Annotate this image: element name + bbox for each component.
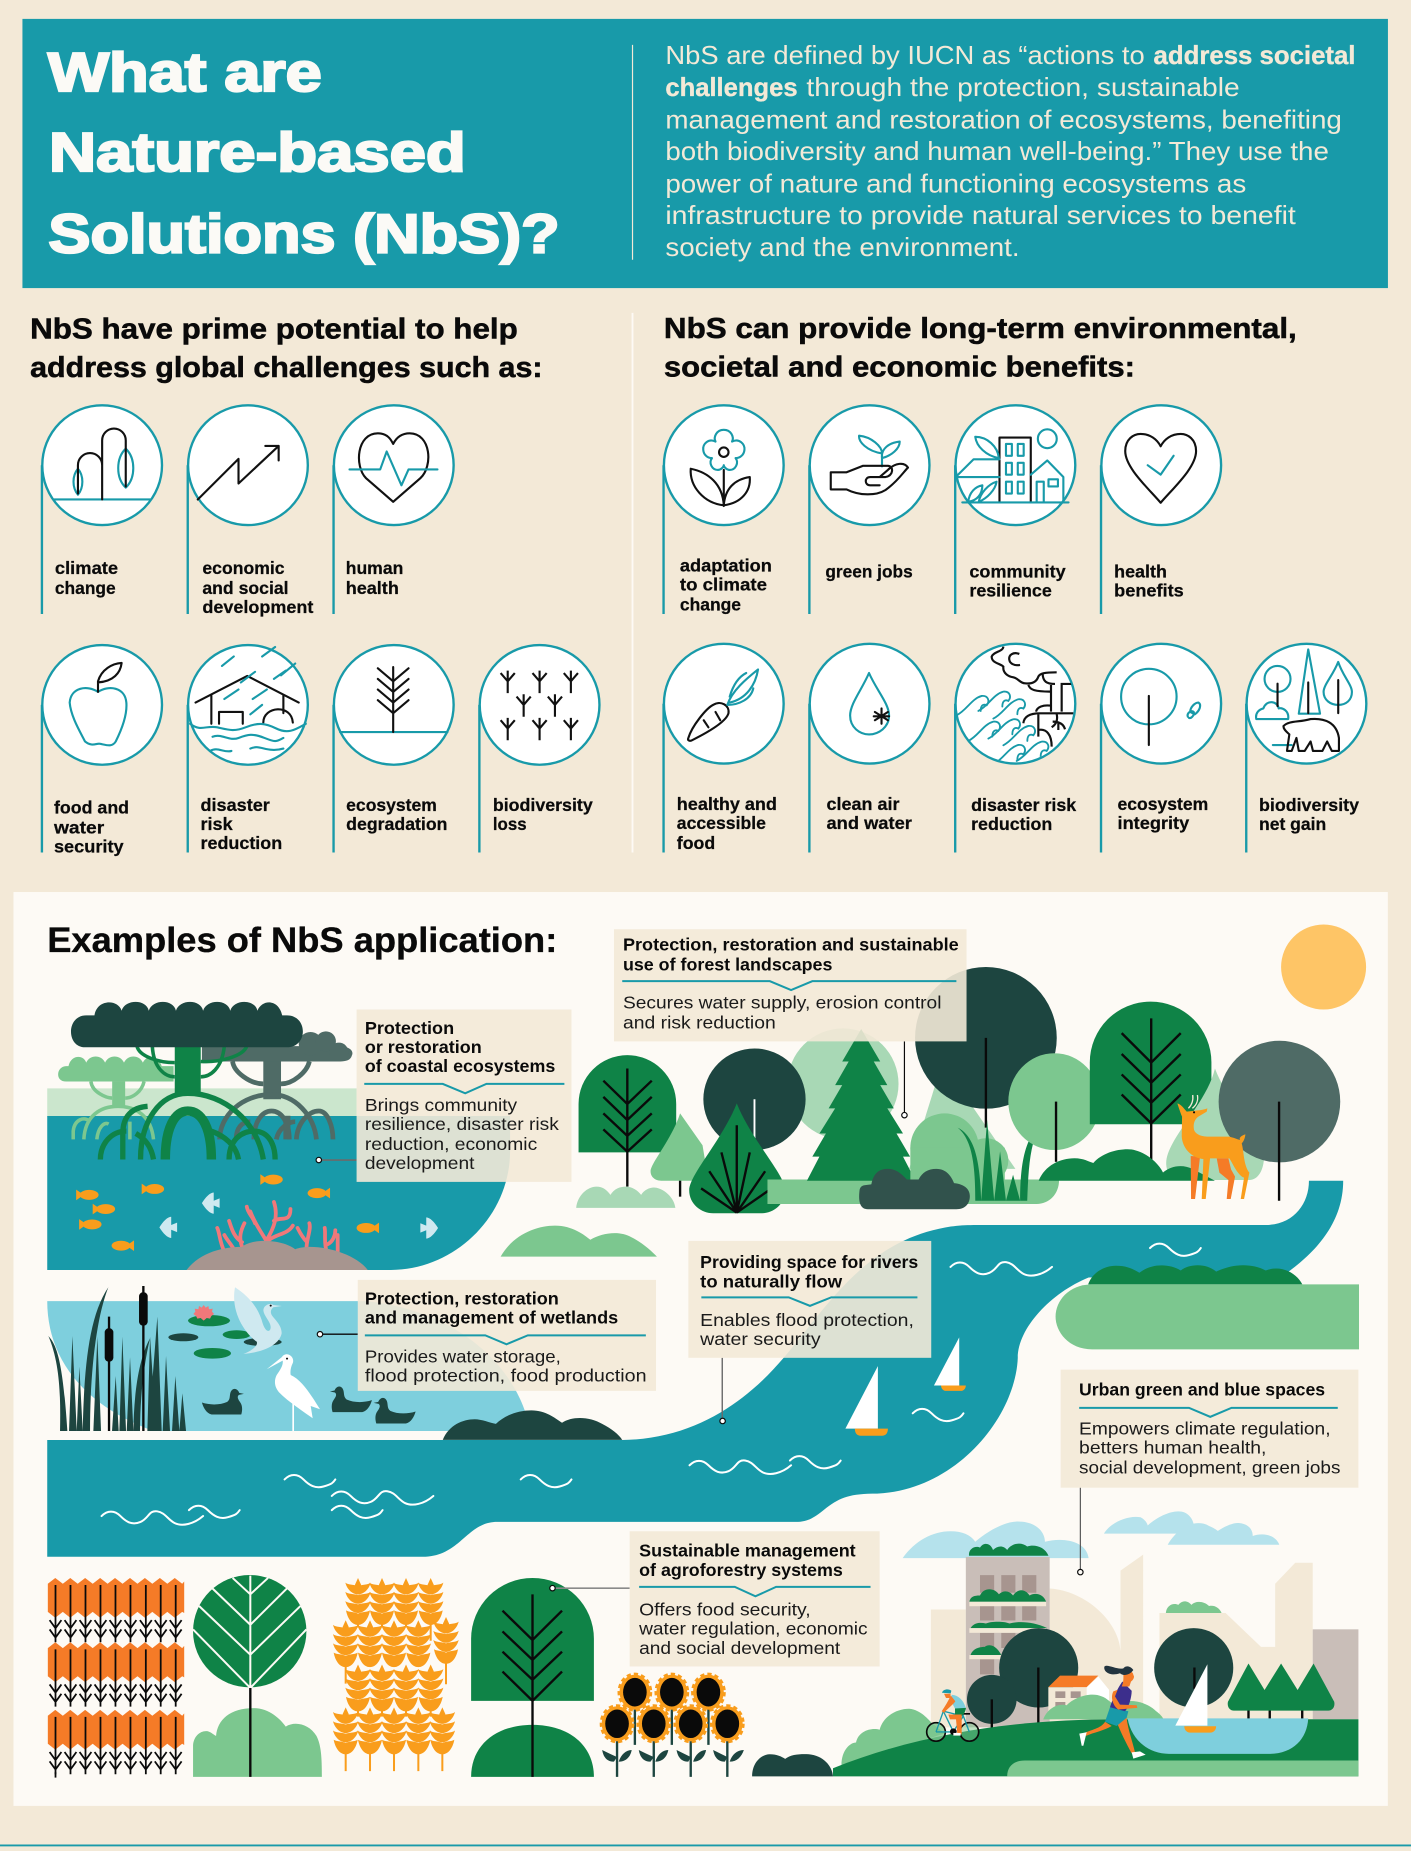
fish school xyxy=(76,1174,438,1251)
callout: agroforestry systems: and social development xyxy=(639,1638,840,1658)
coral and rock xyxy=(187,1202,368,1270)
callout: wetlands: Protection, restoration xyxy=(365,1289,559,1309)
agroforestry: arch tree and bush xyxy=(471,1578,594,1777)
benefit: healthy and accessible food: food xyxy=(677,833,715,853)
callout: rivers: Enables flood protection, xyxy=(700,1310,914,1330)
roof bushes xyxy=(1166,1601,1222,1613)
illustration: wetland wildlife xyxy=(48,1286,320,1431)
callout: urban green and blue spaces xyxy=(1061,1370,1358,1575)
callout: agroforestry systems xyxy=(550,1531,880,1666)
lily pads xyxy=(188,1315,230,1326)
benefit: ecosystem integrity: integrity xyxy=(1118,813,1189,833)
callout: rivers: Providing space for rivers xyxy=(700,1252,918,1272)
benefit: adaptation to climate change xyxy=(664,405,784,614)
callout: coastal ecosystems: reduction, economic xyxy=(365,1134,537,1154)
challenge: economic and social development xyxy=(188,405,313,617)
challenge: economic and social development: economic xyxy=(202,558,285,578)
callout: forest landscapes xyxy=(614,929,967,1118)
river waves xyxy=(102,1244,1201,1525)
challenge: climate change xyxy=(42,405,162,614)
footer rule xyxy=(0,1844,1411,1846)
callout: coastal ecosystems: or restoration xyxy=(365,1037,482,1057)
flying egret xyxy=(234,1287,282,1354)
agroforestry: sunflowers xyxy=(601,1674,744,1777)
white egret xyxy=(267,1354,320,1431)
definition text: infrastructure to provide natural services to benefit xyxy=(665,200,1297,230)
illustration: meadow hill xyxy=(501,1226,657,1257)
panel: examples of NbS application xyxy=(13,892,1388,1806)
definition text: through the protection, sustainable xyxy=(806,72,1240,102)
forest tree: grey round xyxy=(1219,1041,1340,1201)
challenge: biodiversity loss: biodiversity xyxy=(493,795,593,815)
forest tree: tall pine xyxy=(807,1029,916,1181)
illustration: river xyxy=(47,1181,1343,1557)
benefit: ecosystem integrity: ecosystem xyxy=(1118,794,1208,814)
benefit: community resilience: resilience xyxy=(969,580,1052,600)
callout: wetlands xyxy=(317,1280,656,1391)
forest tree: small cone xyxy=(651,1113,708,1197)
challenge: economic and social development: and social xyxy=(202,578,289,598)
heading: benefits xyxy=(664,313,1297,384)
heading: global challenges: address global challenges such as: xyxy=(30,352,543,384)
definition text xyxy=(633,40,1355,262)
challenge: climate change: change xyxy=(55,578,116,598)
deer xyxy=(1177,1095,1249,1199)
benefit: clean air and water: and water xyxy=(827,813,912,833)
benefit: disaster risk reduction: disaster risk xyxy=(971,795,1076,815)
boats xyxy=(845,1337,966,1436)
benefit: biodiversity net gain xyxy=(1246,644,1366,852)
green band xyxy=(767,1180,1059,1204)
benefit: health benefits: benefits xyxy=(1114,580,1184,600)
benefit: ecosystem integrity xyxy=(1101,644,1221,852)
urban dark trees xyxy=(967,1628,1233,1730)
challenge: disaster risk reduction: disaster xyxy=(200,795,270,815)
benefit: community resilience: community xyxy=(969,561,1066,581)
title: Solutions (NbS)? xyxy=(48,202,560,264)
header panel xyxy=(22,19,1388,288)
challenge: disaster risk reduction: reduction xyxy=(200,833,282,853)
callout: urban green and blue spaces: betters human health, xyxy=(1079,1437,1266,1457)
challenge: climate change: climate xyxy=(55,558,118,578)
definition text: challenges xyxy=(665,72,798,102)
forest tree: dark round xyxy=(703,1048,806,1150)
grey mangrove xyxy=(202,1031,352,1139)
illustration: mangrove coast xyxy=(47,1002,510,1270)
forest tree: teardrop xyxy=(689,1103,785,1213)
callout: forest landscapes: and risk reduction xyxy=(623,1012,776,1032)
heading: benefits: societal and economic benefits: xyxy=(664,352,1135,384)
illustration: dark bush on bank xyxy=(443,1410,622,1440)
urban pond xyxy=(1128,1718,1308,1754)
benefit: adaptation to climate change: to climate xyxy=(680,574,767,594)
foreground strip xyxy=(1007,1761,1358,1776)
challenge: economic and social development: development xyxy=(202,597,313,617)
benefit: clean air and water xyxy=(809,644,929,852)
challenge: food and water security: food and xyxy=(54,798,129,818)
light mangrove xyxy=(58,1056,174,1139)
challenge: food and water security: water xyxy=(53,818,104,838)
benefit: adaptation to climate change: change xyxy=(680,594,741,614)
cattails xyxy=(109,1286,143,1431)
section divider xyxy=(632,313,634,852)
callout: agroforestry systems: Offers food security, xyxy=(639,1600,811,1620)
dark mangrove xyxy=(71,1002,303,1159)
challenge: disaster risk reduction: risk xyxy=(200,814,233,834)
grass xyxy=(958,1120,1040,1201)
agroforestry: leaf tree and bush xyxy=(193,1575,322,1777)
green tower xyxy=(966,1544,1050,1727)
cyclist xyxy=(927,1689,979,1741)
challenge: ecosystem degradation: degradation xyxy=(346,814,447,834)
benefit: community resilience xyxy=(955,405,1075,614)
callout: coastal ecosystems: Brings community xyxy=(365,1095,517,1115)
title: Nature-based xyxy=(49,121,466,183)
grey building xyxy=(1313,1629,1358,1719)
benefit: disaster risk reduction xyxy=(955,644,1076,852)
heading: benefits: NbS can provide long-term environmental, xyxy=(664,313,1297,345)
callout: agroforestry systems: water regulation, economic xyxy=(638,1619,868,1639)
challenge: ecosystem degradation xyxy=(334,645,454,852)
house xyxy=(1043,1676,1160,1719)
definition text: NbS are defined by IUCN as “actions to xyxy=(665,40,1145,70)
illustration: sun xyxy=(1281,924,1366,1010)
illustration: forest xyxy=(576,967,1340,1213)
heading: examples: Examples of NbS application: xyxy=(47,920,557,960)
callout: urban green and blue spaces: Empowers climate regulation, xyxy=(1079,1419,1331,1439)
definition text: address societal xyxy=(1154,40,1355,70)
dark shrub xyxy=(859,1169,970,1209)
challenge: biodiversity loss: loss xyxy=(493,814,527,834)
challenge: human health: human xyxy=(346,558,403,578)
benefit: green jobs xyxy=(809,405,929,614)
callout: rivers: to naturally flow xyxy=(700,1271,842,1291)
green ground xyxy=(833,1719,1358,1776)
callout: wetlands: Provides water storage, xyxy=(365,1347,561,1367)
illustration: ducks xyxy=(202,1387,416,1423)
callout: rivers xyxy=(688,1241,931,1424)
benefit: green jobs: green jobs xyxy=(825,561,913,581)
cream buildings xyxy=(931,1555,1313,1727)
callout: coastal ecosystems: resilience, disaster risk xyxy=(365,1114,559,1134)
benefit: health benefits xyxy=(1101,405,1221,614)
benefit: healthy and accessible food xyxy=(664,644,784,853)
benefit: disaster risk reduction: reduction xyxy=(971,814,1052,834)
benefit: healthy and accessible food: accessible xyxy=(677,813,766,833)
illustration: urban scene xyxy=(752,1511,1358,1776)
heading: global challenges xyxy=(30,313,543,384)
callout: coastal ecosystems xyxy=(316,1010,571,1182)
green hill xyxy=(1039,1149,1215,1181)
dark foreground shrub xyxy=(752,1754,833,1776)
lotus xyxy=(193,1305,214,1321)
challenge: human health xyxy=(334,405,454,614)
challenge: disaster risk reduction xyxy=(188,645,308,853)
benefit: healthy and accessible food: healthy and xyxy=(677,794,777,814)
callout: coastal ecosystems: Protection xyxy=(365,1018,454,1038)
sailboat xyxy=(1175,1664,1216,1733)
benefit: biodiversity net gain: biodiversity xyxy=(1259,795,1359,815)
benefit: biodiversity net gain: net gain xyxy=(1259,814,1326,834)
callout: wetlands: and management of wetlands xyxy=(365,1308,618,1328)
reeds xyxy=(48,1287,186,1431)
forest tree: large dark xyxy=(915,967,1057,1128)
forest tree: arch left xyxy=(576,1055,676,1208)
callout: agroforestry systems: of agroforestry systems xyxy=(639,1560,843,1580)
callout: agroforestry systems: Sustainable management xyxy=(639,1541,856,1561)
clouds xyxy=(903,1511,1279,1558)
callout: rivers: water security xyxy=(699,1329,821,1349)
definition text: society and the environment. xyxy=(665,232,1020,262)
definition text: power of nature and functioning ecosystems as xyxy=(665,168,1246,198)
benefit: adaptation to climate change: adaptation xyxy=(680,555,772,575)
benefit: clean air and water: clean air xyxy=(827,794,900,814)
challenge: biodiversity loss xyxy=(479,645,599,852)
forest tree: light round xyxy=(1008,1053,1100,1162)
title xyxy=(48,41,560,264)
callout: forest landscapes: use of forest landscapes xyxy=(623,955,833,975)
illustration: wetland pond xyxy=(47,1301,530,1431)
heading: global challenges: NbS have prime potential to help xyxy=(30,313,518,345)
callout: wetlands: flood protection, food production xyxy=(365,1365,647,1385)
callout: urban green and blue spaces: social development, green jobs xyxy=(1079,1458,1341,1478)
forest tree: pale behind deer xyxy=(1166,1069,1264,1180)
callout: coastal ecosystems: of coastal ecosystems xyxy=(365,1056,555,1076)
urban bushes xyxy=(841,1699,1164,1768)
forest tree: arch right xyxy=(1090,1002,1211,1180)
challenge: human health: health xyxy=(346,578,399,598)
title: What are xyxy=(48,41,322,103)
forest bushes xyxy=(910,1113,1008,1183)
callout: forest landscapes: Protection, restoration and sustainable xyxy=(623,934,959,954)
triple pines xyxy=(1228,1664,1334,1719)
definition text: management and restoration of ecosystems, benefiting xyxy=(665,104,1342,134)
callout: coastal ecosystems: development xyxy=(365,1153,474,1173)
benefit: health benefits: health xyxy=(1114,561,1167,581)
illustration: river bank with hills xyxy=(1056,1265,1359,1349)
runner xyxy=(1079,1666,1146,1759)
agroforestry: orange crop rows xyxy=(48,1578,184,1778)
definition text: both biodiversity and human well-being.” They use the xyxy=(665,136,1329,166)
challenge: ecosystem degradation: ecosystem xyxy=(346,795,437,815)
challenge: food and water security: security xyxy=(54,836,124,856)
challenge: food and water security xyxy=(42,645,162,856)
callout: forest landscapes: Secures water supply, erosion control xyxy=(623,992,942,1012)
callout: urban green and blue spaces: Urban green and blue spaces xyxy=(1079,1380,1325,1400)
agroforestry: wheat field xyxy=(333,1578,459,1771)
